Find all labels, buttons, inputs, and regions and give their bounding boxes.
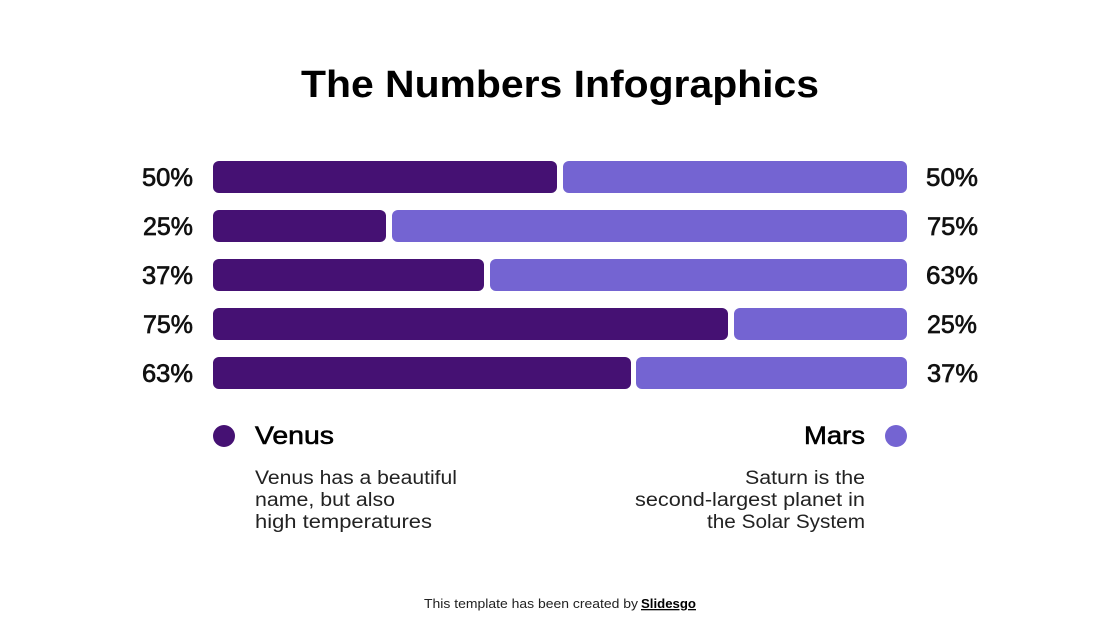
title: The Numbers Infographics bbox=[301, 64, 819, 106]
icon: Mars dot bbox=[885, 425, 907, 447]
Venus description: Venus has a beautiful bbox=[255, 468, 457, 489]
row 3: 37 / 63: 63% bbox=[926, 262, 978, 290]
row 4: 75 / 25: 25% bbox=[927, 311, 977, 339]
row 5: 63 / 37: 63% bbox=[142, 360, 193, 388]
Venus heading: Venus bbox=[255, 422, 334, 450]
icon: Venus dot bbox=[213, 425, 235, 447]
Venus description: name, but also bbox=[255, 490, 395, 511]
row 3: 37 / 63 bbox=[142, 259, 978, 291]
Mars description: the Solar System bbox=[707, 512, 865, 533]
legend: Mars bbox=[635, 422, 907, 533]
Venus description bbox=[255, 468, 457, 533]
legend: Venus bbox=[213, 422, 457, 533]
Mars description: second-largest planet in bbox=[635, 490, 865, 511]
row 1: 50 / 50: 50% bbox=[142, 164, 193, 192]
row 3: 37 / 63: 37% bbox=[142, 262, 193, 290]
row 1: 50 / 50: 50% bbox=[926, 164, 978, 192]
row 4: 75 / 25: 75% bbox=[143, 311, 193, 339]
row 2: 25 / 75 bbox=[143, 210, 978, 242]
footer credit: Slidesgo bbox=[641, 596, 696, 611]
row 5: 63 / 37: 37% bbox=[927, 360, 978, 388]
Venus description: high temperatures bbox=[255, 512, 432, 533]
row 1: 50 / 50 bbox=[142, 161, 978, 193]
footer credit: This template has been created by bbox=[424, 596, 639, 611]
Mars description bbox=[635, 468, 865, 533]
Mars description: Saturn is the bbox=[745, 468, 865, 489]
row 2: 25 / 75: 25% bbox=[143, 213, 193, 241]
bar chart bbox=[142, 161, 978, 389]
row 5: 63 / 37 bbox=[142, 357, 978, 389]
Mars heading: Mars bbox=[804, 422, 865, 450]
row 2: 25 / 75: 75% bbox=[927, 213, 978, 241]
row 4: 75 / 25 bbox=[143, 308, 977, 340]
